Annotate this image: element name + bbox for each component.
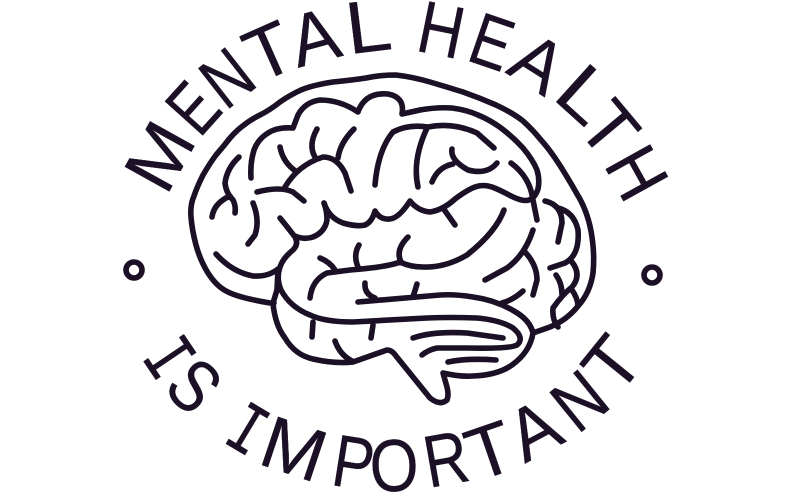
heading: MENTAL HEALTH arc: M — [108, 108, 212, 205]
heading: MENTAL HEALTH arc: T — [563, 85, 656, 173]
heading: IS IMPORTANT arc: M — [251, 399, 337, 498]
heading: IS IMPORTANT arc: N — [535, 354, 624, 448]
lower lobe and brain stem contour — [273, 290, 533, 403]
heading: IS IMPORTANT arc: I — [209, 388, 281, 477]
heading: MENTAL HEALTH arc: E — [150, 67, 236, 149]
cerebrum inner fold contour — [251, 94, 539, 226]
heading: IS IMPORTANT arc: A — [494, 383, 575, 478]
heading: MENTAL HEALTH arc: L — [540, 48, 631, 141]
heading: IS IMPORTANT arc: T — [455, 404, 525, 497]
heading: MENTAL HEALTH arc — [108, 0, 684, 214]
heading: IS IMPORTANT arc: S — [150, 343, 237, 430]
temporal lobe contour — [278, 218, 520, 355]
heading: MENTAL HEALTH arc: H — [589, 132, 684, 214]
heading: MENTAL HEALTH arc: N — [185, 33, 270, 124]
heading: MENTAL HEALTH arc: A — [496, 16, 580, 111]
heading: MENTAL HEALTH arc: T — [231, 4, 306, 98]
heading: IS IMPORTANT arc: T — [566, 320, 659, 408]
brain outer contour — [191, 75, 594, 333]
heading: IS IMPORTANT arc: I — [122, 323, 210, 397]
heading: IS IMPORTANT arc — [122, 320, 659, 500]
icon: right ring dot — [644, 267, 660, 283]
icon: left ring dot — [126, 262, 142, 278]
sulci folds — [212, 125, 578, 362]
icon: brain line drawing — [191, 75, 594, 403]
